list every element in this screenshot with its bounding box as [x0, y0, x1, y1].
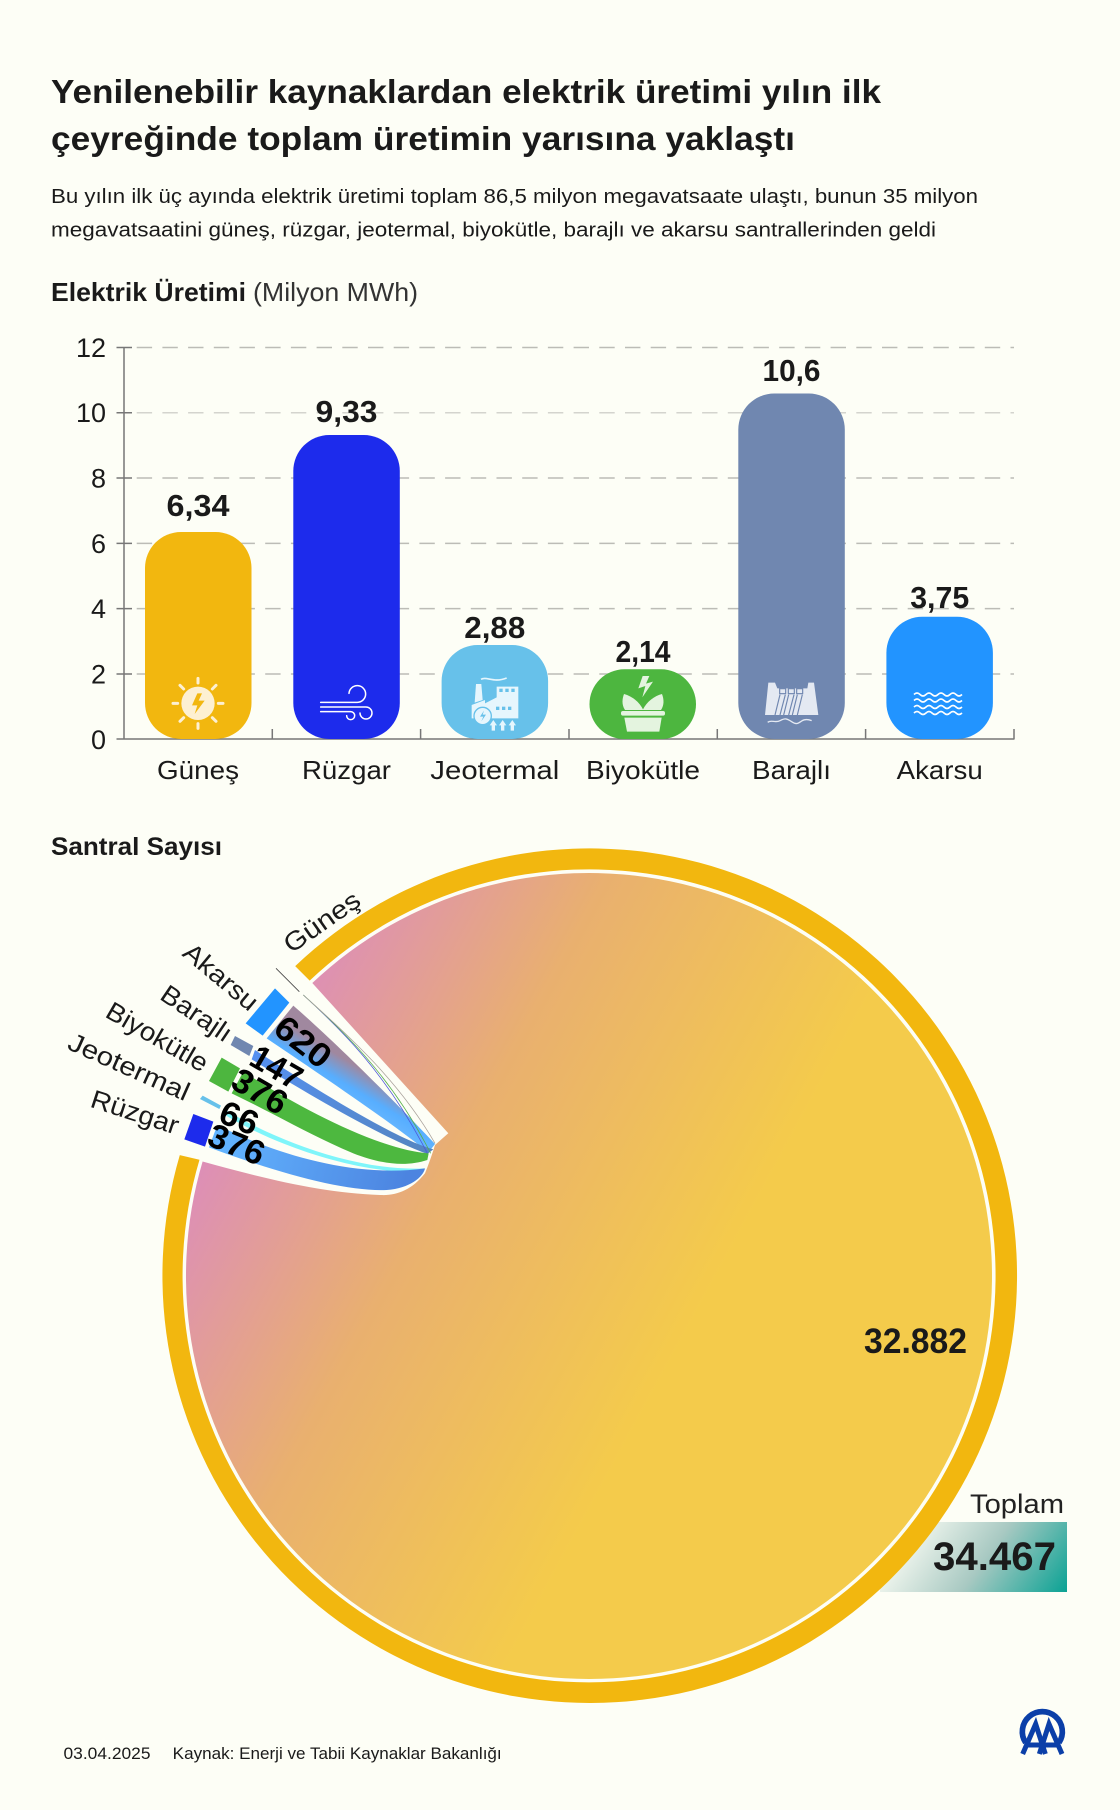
ribbon: Biyokütle — [232, 1072, 429, 1164]
count labels: 620 — [267, 1008, 339, 1076]
y axis labels — [76, 333, 106, 755]
y axis labels: 4 — [91, 594, 106, 624]
source labels: Barajlı — [155, 978, 238, 1048]
category labels: Jeotermal — [430, 755, 559, 785]
line: Güneş marker — [276, 968, 299, 992]
heading: chart: (Milyon MWh) — [253, 277, 418, 307]
ribbons: source flows — [184, 968, 435, 1190]
footer: date and source: 03.04.2025 — [64, 1745, 150, 1763]
value: total: 34.467 — [933, 1535, 1056, 1579]
ribbon strands: Güneş thread — [303, 995, 435, 1153]
source labels: Jeotermal — [64, 1027, 194, 1107]
category labels — [157, 755, 983, 785]
icon: wind — [321, 686, 372, 720]
total box — [880, 1522, 1067, 1592]
ring: Güneş outer arc — [162, 848, 1017, 1703]
chart axes — [116, 347, 1014, 739]
title: Yenilenebilir kaynaklardan elektrik üretimi yılın ilk — [51, 74, 881, 111]
icon: water waves — [914, 693, 962, 714]
square: Biyokütle — [209, 1058, 240, 1092]
bar: Güneş — [145, 532, 252, 739]
value labels: 6,34 — [166, 488, 230, 523]
source labels: Biyokütle — [101, 995, 214, 1078]
bar: Rüzgar — [293, 435, 400, 739]
bar chart — [76, 333, 1014, 785]
category labels: Güneş — [157, 755, 239, 785]
title: çeyreğinde toplam üretimin yarısına yaklaştı — [51, 121, 795, 158]
category labels: Rüzgar — [302, 755, 391, 785]
heading: plant count: Santral Sayısı — [51, 833, 222, 861]
y axis labels: 10 — [76, 398, 106, 428]
value labels: 2,88 — [464, 610, 525, 645]
count labels: 66 — [214, 1094, 264, 1143]
square: Jeotermal — [200, 1096, 221, 1109]
value labels: 3,75 — [910, 580, 969, 615]
bar: Akarsu — [886, 617, 993, 739]
bar: Barajlı — [738, 394, 845, 739]
footer: date and source: Kaynak: Enerji ve Tabii Kaynaklar Bakanlığı — [173, 1745, 502, 1763]
count labels: 147 — [243, 1038, 309, 1098]
ribbon: Jeotermal — [225, 1111, 424, 1172]
value labels — [166, 353, 969, 669]
value labels: 2,14 — [616, 634, 671, 669]
subtitle text block — [51, 186, 978, 242]
count labels — [202, 1008, 339, 1173]
category labels: Barajlı — [752, 755, 831, 785]
square: Rüzgar — [184, 1114, 213, 1147]
y axis labels: 6 — [91, 529, 106, 559]
value labels: 10,6 — [762, 353, 820, 388]
ribbon: Barajlı — [252, 1050, 433, 1154]
icon: dam — [765, 683, 818, 724]
subtitle text block: Bu yılın ilk üç ayında elektrik üretimi toplam 86,5 milyon megavatsaate ulaştı, bunun 35 milyon — [51, 186, 978, 208]
value: Güneş count: 32.882 — [864, 1322, 967, 1361]
source labels: Rüzgar — [87, 1084, 183, 1140]
bar: Biyokütle — [590, 669, 696, 739]
count labels: 376 — [202, 1116, 270, 1173]
title — [51, 74, 881, 158]
source labels — [64, 884, 366, 1140]
count labels: 376 — [225, 1061, 294, 1123]
source labels: Güneş — [277, 884, 366, 959]
heading: chart: Elektrik Üretimi — [51, 277, 246, 307]
icon: biomass — [621, 676, 665, 732]
square: Barajlı — [231, 1036, 253, 1056]
label: total: Toplam — [970, 1489, 1064, 1519]
source labels: Akarsu — [177, 937, 265, 1017]
y axis labels: 2 — [91, 660, 106, 690]
subtitle text block: megavatsaatini güneş, rüzgar, jeotermal, biyokütle, barajlı ve akarsu santrallerinden geldi — [51, 220, 936, 242]
icon: geothermal plant — [472, 678, 518, 731]
category labels: Biyokütle — [586, 755, 700, 785]
category labels: Akarsu — [897, 755, 983, 785]
value labels: 9,33 — [316, 394, 378, 429]
logo: AA — [1022, 1712, 1062, 1754]
ribbon: Akarsu — [267, 1006, 435, 1153]
ribbon: Rüzgar — [209, 1125, 425, 1190]
heading: chart — [51, 277, 418, 307]
square: Akarsu — [246, 988, 289, 1036]
y axis labels: 8 — [91, 464, 106, 494]
icon: sun — [173, 678, 223, 728]
bar: Jeotermal — [442, 645, 548, 739]
pie: Güneş share — [186, 873, 992, 1679]
y axis labels: 0 — [91, 725, 106, 755]
y axis labels: 12 — [76, 333, 106, 363]
